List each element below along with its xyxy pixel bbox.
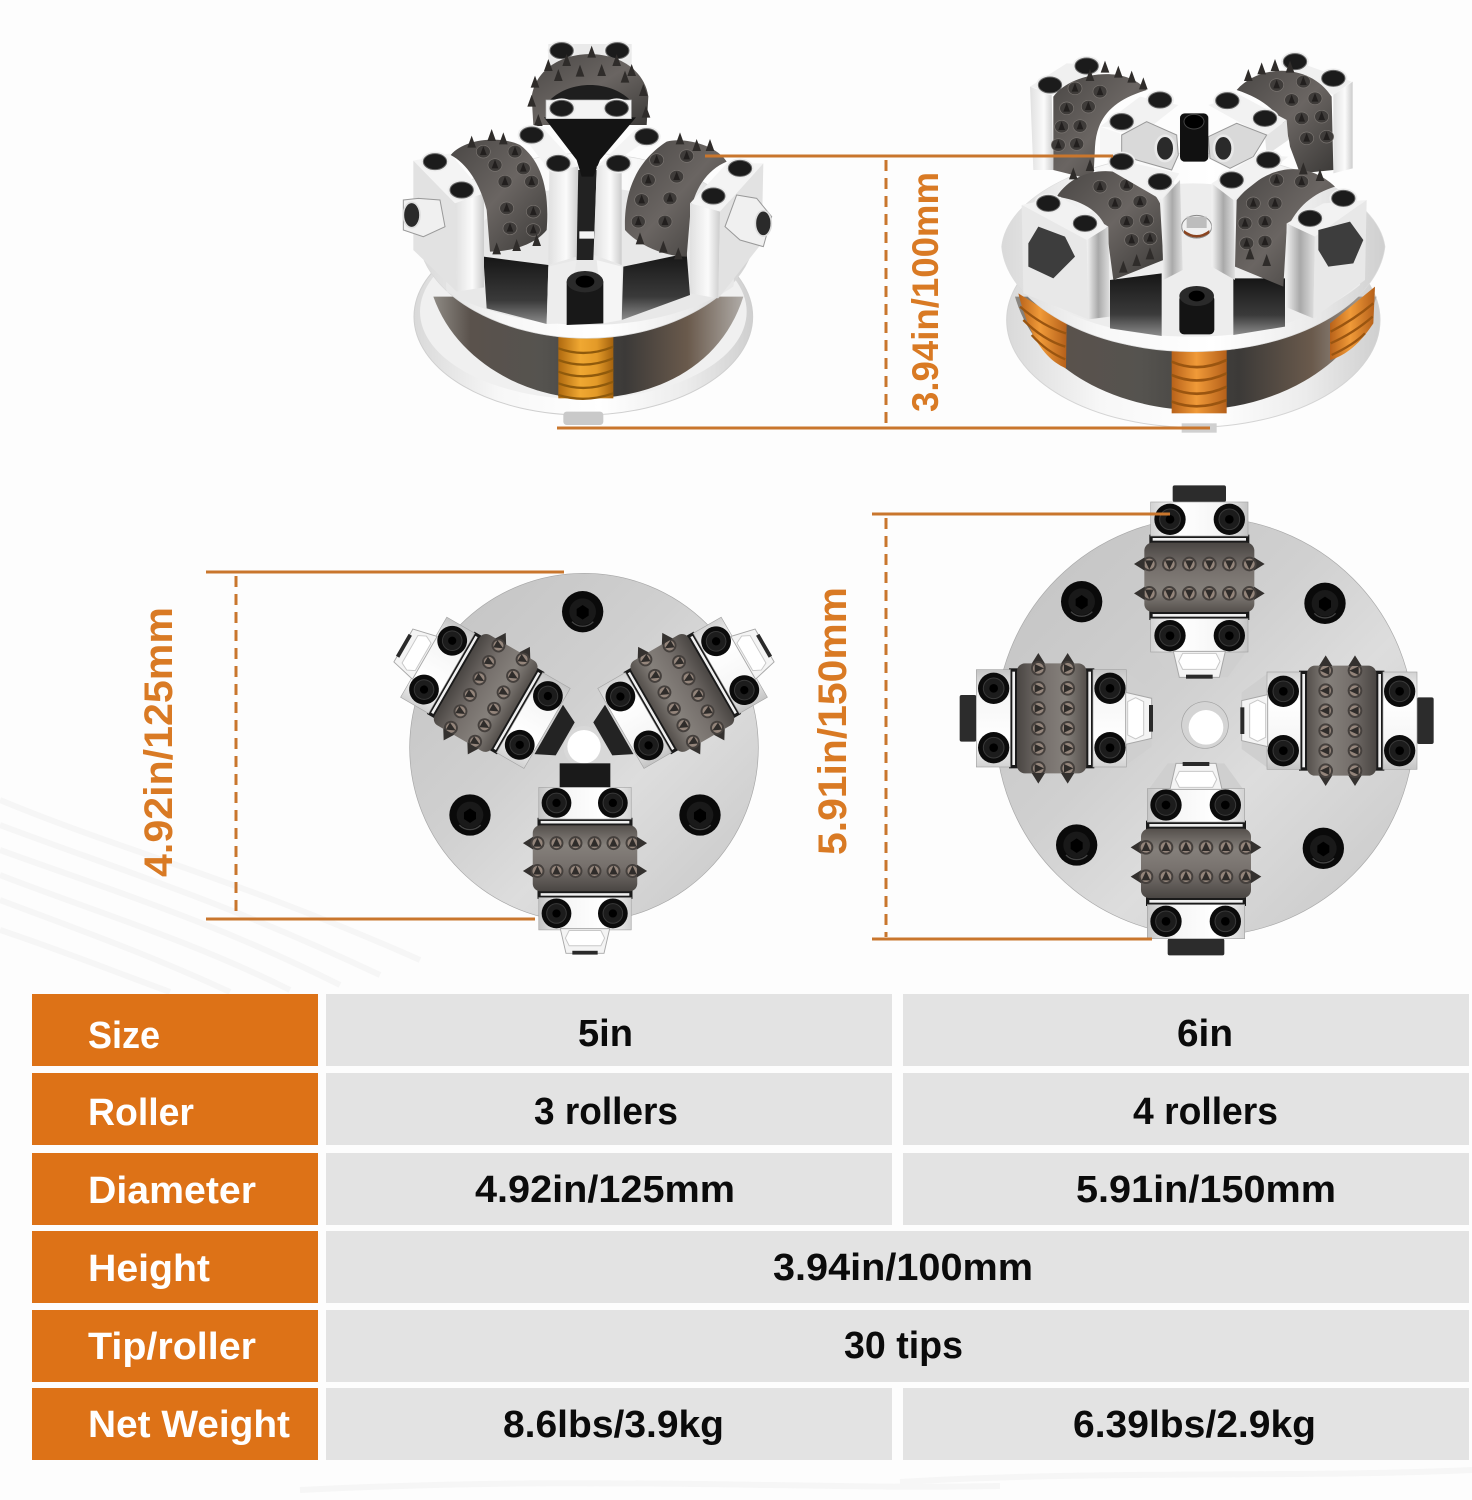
front right block and roller: [1212, 150, 1367, 318]
upper disc: [419, 153, 753, 338]
table row: Net Weight: 6.39lbs/2.9kg: [1073, 1404, 1316, 1446]
table row: Net Weight: [32, 1388, 1469, 1460]
roller assembly: bottom: [1131, 762, 1261, 955]
table row: Net Weight: Net Weight: [88, 1404, 290, 1446]
roller assembly: upper right: [572, 591, 797, 793]
table row: Tip/roller: 30 tips: [844, 1325, 963, 1367]
table row: Height: [32, 1231, 1469, 1303]
table row: Net Weight: 8.6lbs/3.9kg: [503, 1404, 724, 1446]
center hole: [563, 726, 605, 767]
table row: Roller: 3 rollers: [534, 1091, 678, 1133]
table row: Tip/roller: [32, 1310, 1469, 1382]
roller assembly: top: [1134, 485, 1265, 679]
table row: Size: 6in: [1177, 1013, 1233, 1055]
product photo: 6in plate side view: [1002, 52, 1385, 433]
product photo: 5in plate side view: [403, 41, 772, 425]
right roller: [625, 132, 727, 259]
back left block and roller: [1030, 56, 1178, 180]
roller assembly: upper left: [371, 591, 596, 793]
table row: Diameter: 4.92in/125mm: [475, 1169, 735, 1211]
roller assembly: right: [1240, 655, 1434, 786]
table row: Roller: 4 rollers: [1133, 1091, 1278, 1133]
table row: Height: 3.94in/100mm: [773, 1247, 1033, 1289]
left block with nut: [403, 152, 484, 292]
roller assembly: left: [960, 653, 1153, 784]
upper disc: [1002, 153, 1385, 352]
back right block and roller: [1180, 52, 1353, 173]
springs: [1018, 287, 1375, 413]
table row: Size: 5in: [578, 1013, 633, 1055]
table row: Roller: [32, 1073, 1469, 1145]
table row: Size: Size: [88, 1015, 160, 1057]
screw caps: [1056, 581, 1346, 869]
lower disc: [1007, 213, 1380, 433]
left roller: [451, 129, 547, 254]
screw caps: [449, 591, 721, 836]
spring: [558, 337, 613, 399]
right block with nut: [690, 158, 772, 298]
center bolt: [567, 271, 603, 325]
table row: Diameter: Diameter: [88, 1170, 256, 1212]
table row: Size: [32, 994, 1469, 1066]
lower disc: [414, 218, 753, 425]
roller assembly: bottom: [523, 763, 647, 955]
base plate: [996, 517, 1414, 936]
dimension: height 3.94in/100mm: 3.94in/100mm: [905, 172, 946, 412]
dimension: diameter 4.92in/125mm: 4.92in/125mm: [137, 607, 181, 877]
top roller and block: [527, 41, 650, 177]
center bolt: [1179, 286, 1214, 334]
front left block and roller: [1022, 152, 1183, 319]
base plate: [410, 573, 758, 922]
center hole: [1182, 702, 1228, 748]
center blocks: [518, 125, 661, 265]
product photo: 5in plate top view: [371, 573, 797, 955]
product photo: 6in plate top view: [960, 485, 1434, 955]
specification table: [32, 994, 1469, 1460]
table row: Tip/roller: Tip/roller: [88, 1326, 256, 1368]
table row: Diameter: [32, 1153, 1469, 1225]
table row: Roller: Roller: [88, 1092, 194, 1134]
dimension: diameter 5.91in/150mm: 5.91in/150mm: [811, 587, 855, 855]
table row: Height: Height: [88, 1248, 210, 1290]
table row: Diameter: 5.91in/150mm: [1076, 1169, 1336, 1211]
